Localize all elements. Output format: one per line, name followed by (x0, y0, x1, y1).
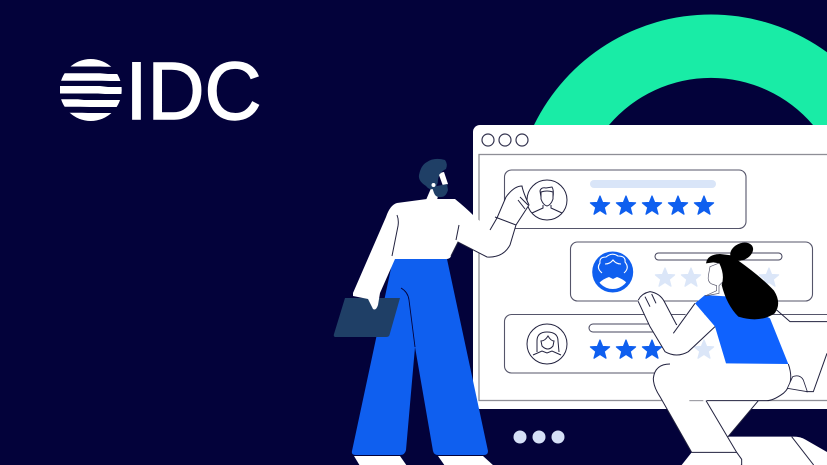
outlines (653, 310, 827, 465)
outlined bar (655, 253, 782, 260)
browser window (473, 125, 827, 409)
pagination dots (514, 430, 564, 444)
arm outlines (392, 186, 529, 257)
laptop backing (770, 322, 827, 399)
review card 3 (504, 314, 827, 373)
review card 2 (570, 242, 812, 301)
hair (419, 159, 447, 189)
pale stars (655, 268, 779, 286)
avatar: woman (527, 324, 567, 364)
window control dots (482, 134, 528, 146)
review card 1 (504, 170, 746, 228)
window content border (479, 154, 827, 400)
outlined bar (589, 324, 679, 332)
trousers (352, 259, 488, 455)
logo: IDC (60, 59, 260, 121)
logo globe icon (60, 59, 125, 121)
forearm and hand (638, 292, 715, 355)
window frame (473, 125, 827, 409)
arm outline (638, 292, 715, 355)
logo wordmark: IDC (126, 46, 262, 137)
far leg and foot (728, 437, 827, 465)
beard (432, 184, 448, 197)
thigh and leg (653, 364, 791, 465)
figure: woman (638, 239, 827, 465)
trouser crease (401, 288, 415, 347)
hair and bun (706, 239, 778, 319)
briefcase (334, 298, 400, 337)
under-thigh panel (705, 401, 758, 452)
avatar: man (527, 180, 567, 220)
shoes (354, 456, 494, 465)
mixed stars (590, 340, 714, 358)
avatar: woman on blue (592, 252, 633, 296)
neck and face (705, 263, 726, 296)
face (439, 172, 448, 186)
placeholder bar (590, 180, 716, 188)
green arc (534, 14, 827, 125)
blue top (695, 295, 788, 364)
neck (426, 186, 438, 200)
ear (432, 183, 436, 187)
hand on briefcase (353, 292, 380, 310)
figure: man (334, 159, 529, 465)
five blue stars (590, 196, 714, 214)
shirt and arms (353, 186, 529, 293)
hand on laptop (787, 376, 807, 392)
